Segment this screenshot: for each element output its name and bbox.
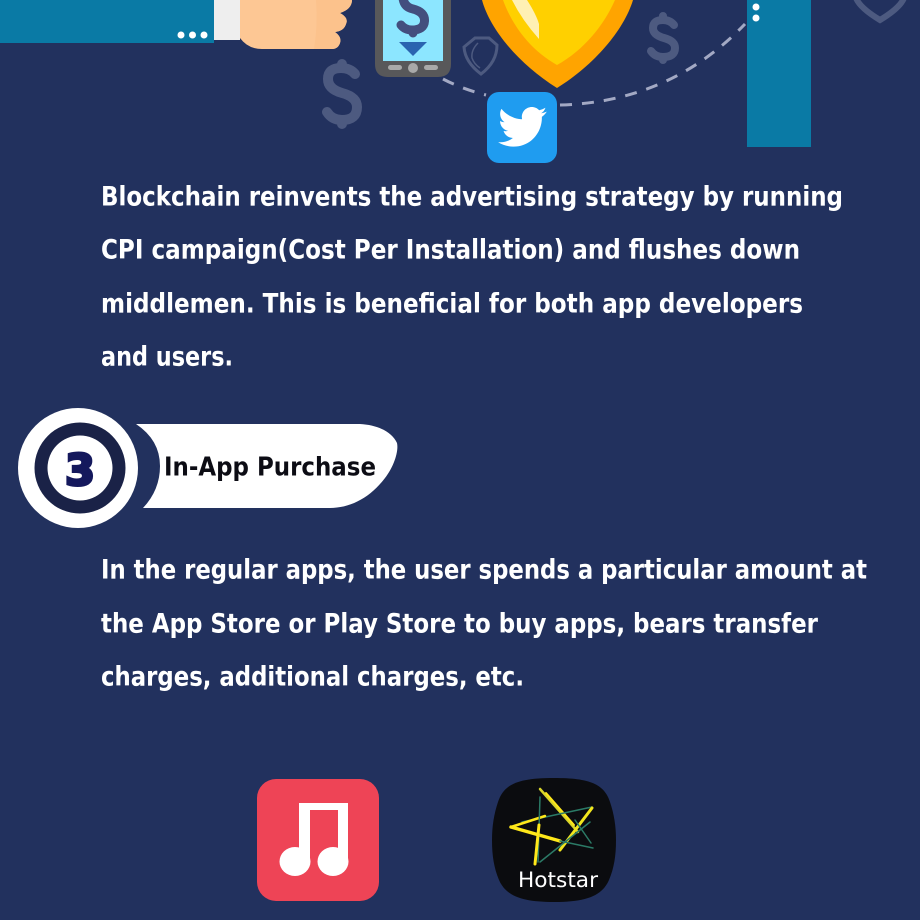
paragraph: advertising strategy <box>101 182 843 372</box>
heading pill <box>136 424 397 508</box>
right arm sleeve <box>747 0 811 147</box>
section heading: In-App Purchase <box>18 408 397 528</box>
paragraph: in-app purchase: charges, additional charges, etc. <box>101 662 524 692</box>
paragraph: advertising strategy: middlemen. This is beneficial for both app developers <box>101 288 803 320</box>
icon: Hotstar app: Hotstar <box>518 868 598 892</box>
paragraph: in-app purchase <box>101 554 867 692</box>
icon: music app <box>257 779 379 901</box>
faded dollar sign right <box>651 16 675 60</box>
faded shield top right <box>856 0 904 20</box>
star strokes <box>511 789 593 864</box>
left arm with sleeve and hand <box>0 0 352 49</box>
phone with dollar sign <box>375 0 451 77</box>
icon: Hotstar app <box>492 778 616 902</box>
paragraph: in-app purchase: the App Store or Play Store to buy apps, bears transfer <box>101 608 819 640</box>
twitter icon <box>487 92 557 163</box>
large yellow shield <box>482 0 633 88</box>
heading text: In-App Purchase <box>164 452 376 482</box>
number badge <box>18 408 138 528</box>
faded dollar sign left <box>327 64 357 124</box>
dashed arc connector <box>443 24 745 105</box>
paragraph: advertising strategy: CPI campaign(Cost Per Installation) and flushes down <box>101 234 800 266</box>
small faded shield <box>464 38 497 74</box>
number badge: 3 <box>65 446 95 496</box>
paragraph: advertising strategy: and users. <box>101 342 233 372</box>
